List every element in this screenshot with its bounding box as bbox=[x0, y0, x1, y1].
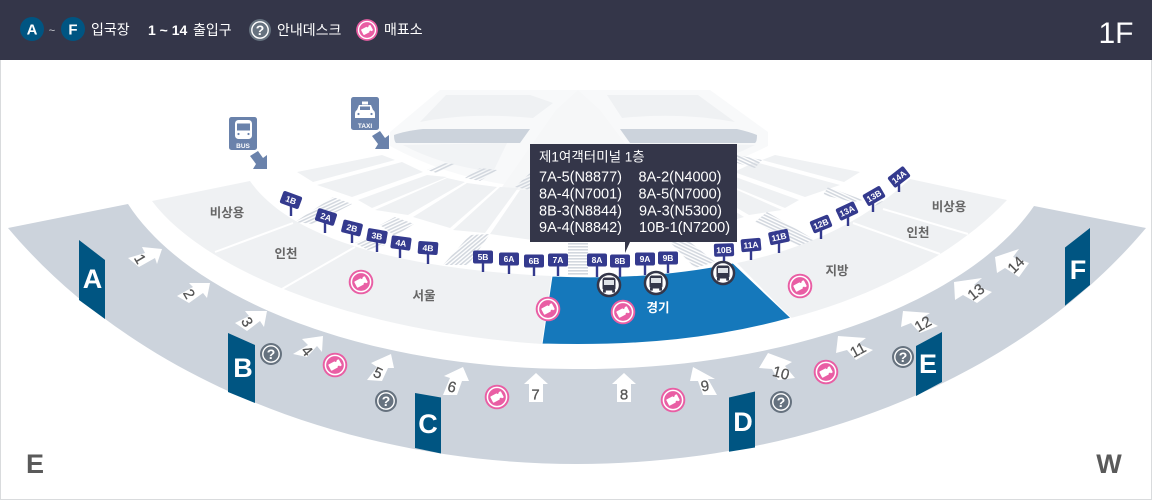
exit arrow 10 bbox=[759, 353, 795, 384]
exit arrow 5: 5 bbox=[370, 364, 385, 383]
arrow: to bus bbox=[250, 151, 267, 169]
terminal road lanes left bbox=[297, 155, 532, 240]
callout list right: 8A-5(N7000) bbox=[638, 186, 722, 202]
entrance gate D bbox=[729, 392, 755, 452]
sign 1B: 1B bbox=[284, 193, 298, 207]
exit arrow 8 bbox=[612, 373, 636, 404]
icon: information desk 3: ? bbox=[777, 394, 785, 410]
callout list left: 8B-3(N8844) bbox=[539, 204, 622, 220]
legend: gates: 입국장 bbox=[91, 22, 130, 38]
departure hall band bbox=[8, 204, 1146, 464]
exit arrow 5 bbox=[367, 354, 394, 383]
exit arrow 9 bbox=[690, 367, 717, 396]
sign 6B bbox=[524, 254, 544, 276]
sign 8B bbox=[610, 254, 630, 277]
sign 4A bbox=[390, 235, 412, 258]
sign 11A: 11A bbox=[743, 239, 759, 251]
exit arrow 2: 2 bbox=[179, 286, 198, 302]
icon: information desk 4 bbox=[892, 346, 914, 368]
icon: ticket office 1 bbox=[349, 270, 373, 294]
label: 서울: 서울 bbox=[412, 289, 436, 303]
legend: exits: 출입구 bbox=[193, 22, 232, 38]
legend: information desk bbox=[249, 19, 342, 41]
label: 지방: 지방 bbox=[825, 264, 849, 278]
label: 인천: 인천 bbox=[274, 247, 298, 261]
icon: ticket office 3 bbox=[611, 300, 635, 324]
sign 6A bbox=[499, 252, 519, 274]
callout list right bbox=[638, 170, 730, 236]
sign 13B bbox=[862, 185, 886, 212]
icon: bus stop 2 bbox=[644, 271, 668, 295]
sign 12B: 12B bbox=[812, 216, 830, 232]
legend: ticket office bbox=[356, 19, 423, 41]
exit arrow 10: 10 bbox=[771, 363, 791, 384]
icon: information desk 1 bbox=[260, 343, 282, 365]
entrance gate B: B bbox=[233, 353, 253, 383]
legend: gates: F bbox=[68, 22, 78, 38]
icon: ticket office 4 bbox=[788, 274, 812, 298]
exit arrow 3 bbox=[235, 311, 267, 331]
entrance gate F: F bbox=[1070, 255, 1086, 285]
sign 3B bbox=[366, 228, 388, 252]
parking zone: 비상용 인천 서울 (left) bbox=[152, 181, 552, 344]
sign 13A bbox=[835, 201, 859, 226]
sign 10B bbox=[714, 243, 734, 262]
icon: ticket office 5 bbox=[323, 353, 347, 377]
sign 2A: 2A bbox=[319, 211, 333, 223]
entrance gate D: D bbox=[733, 407, 753, 437]
sign 11B bbox=[768, 229, 790, 253]
exit arrow 7: 7 bbox=[531, 386, 540, 404]
entrance gate A bbox=[79, 240, 105, 319]
crosswalks bbox=[295, 155, 887, 276]
label: 경기: 경기 bbox=[646, 300, 670, 315]
icon: taxi sign: TAXI bbox=[358, 123, 372, 130]
exit arrow 8: 8 bbox=[620, 386, 628, 404]
icon: bus sign: BUS bbox=[236, 143, 251, 150]
exit arrow 13: 13 bbox=[964, 281, 988, 304]
icon: ticket office 6 bbox=[485, 385, 509, 409]
label: 비상용: 비상용 bbox=[210, 206, 244, 220]
legend: information desk: 안내데스크 bbox=[277, 22, 342, 38]
sign 3B: 3B bbox=[371, 230, 383, 242]
compass label E: E bbox=[26, 449, 44, 479]
exit arrow 11 bbox=[836, 336, 873, 362]
sign 6A: 6A bbox=[504, 254, 514, 264]
entrance gate C: C bbox=[418, 409, 438, 439]
airport terminal building bbox=[390, 90, 768, 190]
exit arrow 2 bbox=[177, 283, 210, 303]
icon: bus stop 3 bbox=[711, 261, 735, 285]
exit arrow 12 bbox=[901, 311, 938, 336]
label: 비상용 right: 비상용 bbox=[932, 200, 966, 214]
header bar bbox=[0, 0, 1152, 60]
legend: gates: ~ bbox=[49, 25, 55, 37]
icon: bus stop 1 bbox=[597, 273, 621, 297]
legend: information desk: ? bbox=[256, 22, 264, 38]
icon: information desk 1: ? bbox=[267, 346, 275, 362]
legend: ticket office: 매표소 bbox=[384, 22, 423, 38]
entrance gate F bbox=[1065, 228, 1090, 306]
exit arrow 1 bbox=[128, 247, 162, 267]
sign 9A: 9A bbox=[640, 254, 650, 264]
sign 7A bbox=[548, 254, 568, 276]
sign 4A: 4A bbox=[395, 237, 407, 249]
sign 13A: 13A bbox=[838, 203, 856, 219]
exit arrow 6 bbox=[443, 367, 469, 397]
exit arrow 1: 1 bbox=[130, 251, 149, 267]
exit arrow 9: 9 bbox=[700, 377, 711, 396]
entrance gate E bbox=[916, 332, 942, 396]
sign 4B bbox=[418, 241, 438, 264]
icon: taxi sign bbox=[351, 97, 379, 130]
sign 12B bbox=[809, 214, 833, 239]
sign 2A bbox=[314, 208, 338, 233]
exit arrow 13 bbox=[954, 278, 992, 304]
icon: information desk 4: ? bbox=[899, 349, 907, 365]
icon: information desk 2: ? bbox=[382, 393, 390, 409]
callout: terminal 1 floor 1 bus stops bbox=[530, 144, 737, 253]
sign 2B bbox=[341, 219, 363, 243]
exit arrow 14 bbox=[995, 249, 1029, 277]
callout list left bbox=[539, 170, 622, 236]
exit arrow 4: 4 bbox=[297, 343, 316, 360]
exit arrow 3: 3 bbox=[237, 314, 256, 330]
arrow: to taxi bbox=[372, 131, 389, 149]
icon: ticket office 8 bbox=[814, 360, 838, 384]
exit arrow 4 bbox=[293, 336, 323, 360]
sign 8B: 8B bbox=[615, 256, 625, 266]
sign 9B: 9B bbox=[663, 253, 673, 263]
entrance gate A: A bbox=[83, 264, 102, 294]
parking zone: 지방 인천 비상용 (right) bbox=[737, 179, 1007, 318]
floor label: 1F bbox=[1098, 17, 1134, 50]
sign 4B: 4B bbox=[422, 243, 434, 253]
sign 1B bbox=[279, 190, 303, 216]
entrance gate B bbox=[228, 333, 255, 403]
exit arrow 6: 6 bbox=[446, 378, 458, 397]
sign 8A: 8A bbox=[592, 255, 602, 265]
terminal road lanes right bbox=[639, 155, 860, 233]
legend: exits: 1 ~ 14 bbox=[148, 22, 188, 38]
callout list right: 9A-3(N5300) bbox=[639, 204, 722, 220]
callout list right: 8A-2(N4000) bbox=[638, 170, 722, 186]
icon: information desk 2 bbox=[375, 390, 397, 412]
compass label W: W bbox=[1096, 449, 1122, 479]
legend: gates: A bbox=[27, 22, 38, 38]
entrance gate C bbox=[415, 393, 441, 454]
sign 6B: 6B bbox=[529, 256, 539, 266]
sign 11A bbox=[740, 238, 762, 260]
highlighted parking zone: 경기 bbox=[542, 263, 791, 345]
exit arrow 11: 11 bbox=[847, 339, 869, 362]
sign 2B: 2B bbox=[346, 222, 358, 234]
callout list right: 10B-1(N7200) bbox=[639, 220, 730, 236]
legend: exits bbox=[148, 22, 232, 38]
sign 10B: 10B bbox=[716, 245, 732, 255]
legend: gates bbox=[20, 17, 130, 41]
exit arrow 14: 14 bbox=[1004, 253, 1028, 277]
icon: ticket office 7 bbox=[661, 388, 685, 412]
sign 5B bbox=[473, 250, 493, 272]
callout list left: 8A-4(N7001) bbox=[539, 186, 622, 202]
exit arrow 7 bbox=[524, 373, 548, 404]
sign 5B: 5B bbox=[478, 252, 488, 262]
sign 13B: 13B bbox=[865, 188, 883, 204]
sign 7A: 7A bbox=[553, 255, 563, 265]
exit arrow 12: 12 bbox=[912, 313, 935, 336]
sign 14A: 14A bbox=[890, 168, 908, 186]
label: 인천 right: 인천 bbox=[906, 226, 930, 240]
callout list left: 7A-5(N8877) bbox=[539, 170, 622, 186]
sign 14A bbox=[887, 166, 911, 192]
sign 8A bbox=[587, 254, 607, 277]
sign 9A bbox=[635, 252, 655, 275]
icon: ticket office 2 bbox=[536, 297, 560, 321]
callout heading: 제1여객터미널 1층 bbox=[539, 150, 645, 164]
sign 9B bbox=[658, 252, 678, 273]
entrance gate E: E bbox=[919, 349, 937, 379]
callout list left: 9A-4(N8842) bbox=[539, 220, 622, 236]
icon: information desk 3 bbox=[770, 391, 792, 413]
sign 11B: 11B bbox=[771, 231, 787, 243]
icon: bus sign bbox=[229, 117, 257, 150]
